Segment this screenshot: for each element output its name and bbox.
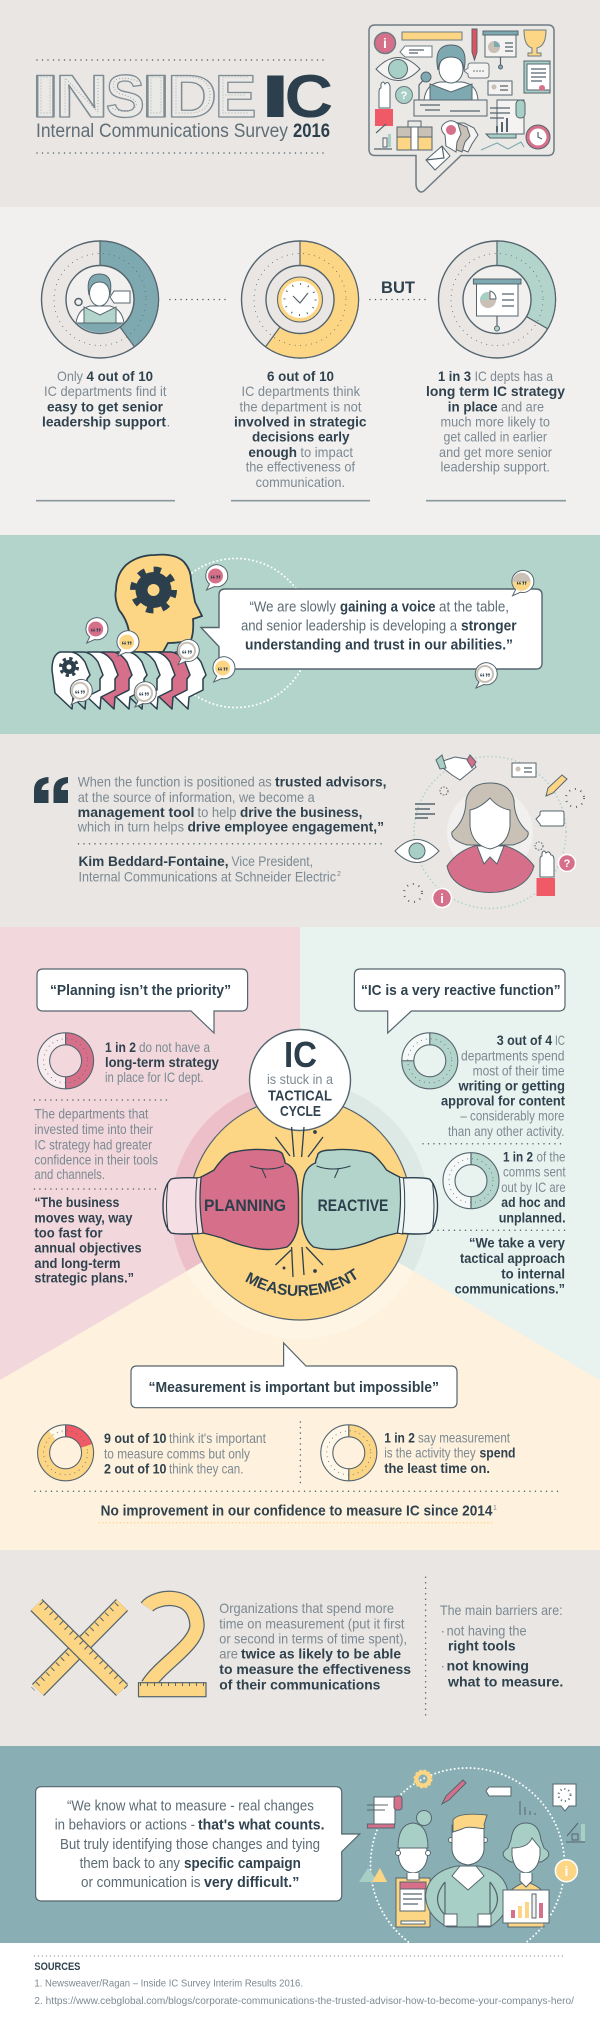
text: one in three: and get more senior: [439, 445, 552, 460]
text: one in three: in place: [448, 400, 498, 414]
text: business moves quote: too fast for: [34, 1225, 103, 1240]
text: three out of four statistic: 3 out of 4: [497, 1033, 553, 1048]
text: six out of ten: 6 out of 10: [267, 369, 334, 384]
icons: small quotation bubbles: “”: [217, 666, 228, 678]
text: one in three: much more likely to: [440, 415, 550, 430]
callout: IC is a very reactive function: “IC is a very reactive function”: [361, 982, 561, 999]
panel: six out of ten: [234, 241, 367, 490]
icon: woman surrounded by tools: [395, 755, 584, 908]
callout: what to measure quote: specific campaign: [184, 1856, 301, 1872]
chart: tactical cycle centre: [162, 1028, 438, 1321]
chart: donut three out of four: [402, 1033, 458, 1089]
icon: presentation board: [473, 279, 521, 331]
text: three out of four statistic: [441, 1033, 565, 1139]
icons: small quotation bubbles: “”: [182, 649, 192, 661]
text: three out of four statistic: IC: [555, 1033, 565, 1048]
text: trusted advisors quote: Vice President,: [232, 854, 313, 869]
ruler two: [138, 1598, 206, 1697]
text: six out of ten: enough: [248, 445, 297, 460]
icon: speech bubble of communication tools: ?: [401, 90, 408, 102]
icons: small quotation bubbles: “”: [480, 672, 490, 684]
text: strategy statistic: in place for IC dept.: [105, 1070, 204, 1085]
text: one in three: long term IC strategy: [426, 384, 565, 399]
text: main barriers: right tools: [448, 1638, 516, 1653]
text: nine out of ten statistic: 2 out of 10: [104, 1462, 166, 1477]
title: INSIDE: E: [215, 63, 257, 130]
text: invested time: IC strategy had greater: [34, 1137, 152, 1152]
subtitle: Internal Communications Survey: [36, 121, 288, 142]
title: INSIDE: S: [106, 63, 145, 130]
title: INSIDE: I: [139, 63, 173, 130]
ruler cross: [33, 1603, 127, 1690]
icon: woman surrounded by tools: i: [440, 891, 444, 906]
panel: planning column: [34, 969, 248, 1286]
text: business moves quote: moves way, way: [34, 1210, 133, 1225]
text: one in three: IC depts has a: [475, 369, 553, 384]
callout: what to measure quote: But truly identifying those changes and tying: [60, 1837, 320, 1853]
text: one in three: and are: [501, 400, 544, 414]
callout: planning isn't the priority: “Planning isn’t the priority”: [50, 982, 231, 999]
text: ad hoc statistic: out by IC are: [501, 1180, 566, 1195]
text: business moves quote: annual objectives: [34, 1241, 142, 1256]
callout: what to measure quote: very difficult.”: [204, 1875, 299, 1891]
text: least time statistic: spend: [480, 1446, 516, 1461]
glove: planning: [163, 1149, 298, 1250]
text: six out of ten: decisions early: [252, 430, 350, 445]
callout: what to measure quote: in behaviors or actions -: [55, 1817, 195, 1833]
text: tactical approach quote: “We take a very: [469, 1236, 565, 1251]
icon: clock: [278, 277, 322, 322]
text: trusted advisors quote: which in turn helps: [77, 820, 184, 834]
icons: small quotation bubbles: “”: [121, 640, 132, 652]
text: twice as likely: [219, 1601, 411, 1692]
icons: small quotation bubbles: “”: [138, 691, 150, 703]
small icons: i: [564, 1863, 568, 1879]
panel: four out of ten: [42, 241, 170, 430]
text: invested time: and channels.: [34, 1167, 105, 1182]
callout: what to measure quote: them back to any: [80, 1856, 181, 1872]
panel: tactical cycle background: [0, 927, 600, 1550]
glove: reactive: [302, 1149, 438, 1250]
text: strategy statistic: [105, 1040, 219, 1085]
badge: IC is stuck in a tactical cycle: [250, 1030, 350, 1130]
panel: sources: [0, 1943, 600, 2019]
panel: measurement column: [35, 1343, 561, 1523]
text: six out of ten: the department is not: [240, 400, 362, 414]
callout: voice at the table quote: understanding and trust in our abilities.”: [245, 638, 513, 654]
text: trusted advisors quote: Kim Beddard-Fontaine,: [78, 854, 228, 869]
text: trusted advisors quote: to help: [198, 805, 236, 820]
text: business moves quote: “The business: [34, 1195, 119, 1210]
text: nine out of ten statistic: to measure comms but only: [104, 1446, 250, 1461]
callout: what to measure quote: or communication is: [81, 1875, 200, 1891]
text: trusted advisors quote: at the source of information, we become a: [78, 790, 315, 805]
panel: twice as likely background: [0, 1550, 600, 1746]
text: trusted advisors quote: Internal Communications at Schneider Electric: [78, 870, 336, 884]
callout: voice at the table quote: gaining a voice: [340, 600, 436, 616]
text: tactical approach quote: communications.”: [455, 1282, 565, 1297]
curved label: measurement: MEASUREMENT: [245, 1268, 356, 1296]
text: trusted advisors quote: management tool: [78, 805, 194, 820]
panel: reactive column: [354, 969, 566, 1297]
text: ad hoc statistic: comms sent: [503, 1165, 566, 1180]
text: six out of ten: the effectiveness of: [246, 460, 355, 475]
text: nine out of ten statistic: think they can.: [169, 1462, 243, 1477]
person: centre man: [426, 1814, 508, 1927]
panel: advisor quote background: [0, 734, 600, 927]
icon: row of small heads: [52, 652, 206, 709]
chart: donut nine out of ten: [38, 1425, 94, 1481]
text: twice as likely: of their communications: [219, 1677, 380, 1692]
text: four out of ten: Only: [57, 369, 83, 384]
text: main barriers: ·: [440, 1658, 445, 1673]
label: BUT: [370, 279, 428, 300]
title: IC: C: [285, 63, 333, 130]
icons: small quotation bubbles: “”: [516, 580, 527, 592]
callout: voice at the table quote: [201, 589, 542, 669]
badge: IC is stuck in a tactical cycle: is stuck in a: [267, 1071, 333, 1087]
panel: closing quote background: [0, 1746, 600, 1943]
text: tactical approach quote: [455, 1236, 565, 1297]
text: three out of four statistic: departments spend: [461, 1048, 564, 1063]
text: one in three: leadership support.: [440, 460, 550, 475]
text: twice as likely: time on measurement (put it first: [219, 1616, 405, 1631]
badge: IC is stuck in a tactical cycle: CYCLE: [280, 1103, 321, 1120]
callout: what to measure quote: that's what counts.: [198, 1817, 324, 1833]
text: three out of four statistic: approval for content: [441, 1093, 565, 1108]
text: three out of four statistic: writing or getting: [458, 1078, 565, 1093]
icons: small quotation bubbles: “”: [210, 574, 221, 586]
text: four out of ten: IC departments find it: [44, 384, 167, 399]
icon: x2 built from rulers: [33, 1598, 206, 1697]
text: ad hoc statistic: 1 in 2: [503, 1149, 533, 1164]
icon: team of three with tools: [359, 1770, 585, 1927]
chart: donut one in two reactive: [443, 1153, 499, 1209]
text: trusted advisors quote: trusted advisors,: [275, 774, 386, 790]
callout: voice at the table quote: “We are slowly: [250, 600, 337, 616]
source two: 2. https://www.cebglobal.com/blogs/corporate-communications-the-trusted-advisor-how-to-become-your-companys-hero/: [34, 1995, 574, 2007]
text: six out of ten: involved in strategic: [234, 415, 367, 430]
icon: large opening quotation mark: [34, 777, 68, 803]
chart board: [503, 1890, 549, 1923]
icons: small quotation bubbles: “”: [74, 689, 86, 701]
title: IC: I: [260, 63, 291, 130]
text: least time statistic: is the activity they: [384, 1446, 476, 1461]
text: business moves quote: and long-term: [34, 1256, 120, 1271]
chart: donut one in two planning: [38, 1033, 94, 1089]
text: trusted advisors quote: [77, 774, 387, 884]
icon: person at desk: [74, 274, 130, 332]
text: ad hoc statistic: unplanned.: [499, 1210, 566, 1225]
text: nine out of ten statistic: [104, 1431, 266, 1477]
text: twice as likely: Organizations that spend more: [219, 1601, 394, 1616]
text: four out of ten: leadership support: [42, 415, 166, 430]
text: six out of ten: [234, 369, 367, 490]
text: twice as likely: twice as likely to be able: [241, 1647, 401, 1662]
text: main barriers: [440, 1603, 563, 1690]
callout: what to measure quote: “We know what to measure - real changes: [67, 1799, 314, 1815]
text: trusted advisors quote: 2: [337, 871, 341, 878]
callout: IC is a very reactive function: [354, 969, 565, 1033]
callout: measurement is important but impossible: [131, 1343, 457, 1408]
text: main barriers: what to measure.: [447, 1675, 563, 1690]
text: least time statistic: 1 in 2: [384, 1430, 415, 1445]
text: ad hoc statistic: ad hoc and: [501, 1195, 566, 1210]
callout: planning isn't the priority: [37, 969, 248, 1033]
text: one in three: 1 in 3: [438, 369, 471, 384]
callout: voice at the table quote: stronger: [461, 619, 517, 635]
icon: speech bubble of communication tools: [369, 25, 554, 192]
callout: measurement is important but impossible: “Measurement is important but impossible”: [148, 1379, 439, 1396]
chart: donut one third: [438, 241, 556, 358]
circle: measurement: [189, 1098, 411, 1320]
text: main barriers: not having the: [447, 1624, 527, 1639]
icon: large head with gear: [115, 555, 202, 652]
text: invested time: The departments that: [34, 1107, 149, 1122]
callout: voice at the table quote: at the table,: [439, 600, 509, 616]
title: INSIDE: D: [167, 63, 217, 130]
text: strategy statistic: do not have a: [139, 1040, 210, 1055]
text: four out of ten: 4 out of 10: [86, 369, 153, 384]
source one: 1. Newsweaver/Ragan – Inside IC Survey Interim Results 2016.: [34, 1978, 303, 1990]
text: least time statistic: the least time on.: [384, 1461, 490, 1476]
text: no improvement: No improvement in our confidence to measure IC since 2014: [101, 1503, 493, 1520]
text: three out of four statistic: – considerably more: [460, 1109, 564, 1124]
person: left woman: [396, 1810, 432, 1927]
text: invested time: [34, 1107, 158, 1182]
glove: planning: PLANNING: [204, 1196, 286, 1215]
text: nine out of ten statistic: think it's important: [169, 1431, 266, 1446]
panel: statistics background: [0, 207, 600, 535]
text: twice as likely: are: [219, 1647, 238, 1662]
panel: quote band background: [0, 535, 600, 734]
text: four out of ten: [42, 369, 170, 430]
text: six out of ten: to impact: [300, 445, 353, 460]
text: ad hoc statistic: of the: [536, 1149, 566, 1164]
glove: reactive: REACTIVE: [318, 1196, 388, 1215]
text: tactical approach quote: to internal: [501, 1266, 565, 1281]
text: twice as likely: to measure the effectiveness: [219, 1662, 411, 1677]
text: business moves quote: strategic plans.”: [34, 1271, 134, 1286]
badge: IC is stuck in a tactical cycle: TACTICAL: [268, 1088, 332, 1105]
icon: speech bubble of communication tools: i: [383, 35, 387, 51]
sparks: [276, 1127, 323, 1277]
text: no improvement: 1: [493, 1505, 497, 1512]
chart: donut 40 percent: [42, 241, 158, 358]
text: trusted advisors quote: drive the business,: [240, 805, 362, 820]
title: INSIDE: N: [55, 63, 108, 130]
text: ad hoc statistic: [499, 1149, 566, 1225]
text: invested time: invested time into their: [34, 1122, 153, 1137]
small icons: [359, 1770, 585, 1882]
icons: small quotation bubbles: [70, 565, 534, 707]
panel: header background: [0, 0, 600, 207]
text: nine out of ten statistic: 9 out of 10: [104, 1431, 166, 1446]
text: three out of four statistic: than any other activity.: [448, 1124, 564, 1139]
text: strategy statistic: 1 in 2: [105, 1040, 136, 1055]
subtitle: 2016: [293, 121, 330, 142]
text: six out of ten: IC departments think: [242, 384, 360, 399]
panel: one in three: [426, 241, 565, 475]
chart: donut 60 percent: [242, 241, 359, 358]
text: least time statistic: [384, 1430, 516, 1476]
text: least time statistic: say measurement: [418, 1430, 510, 1445]
badge: IC is stuck in a tactical cycle: IC: [284, 1034, 317, 1075]
text: three out of four statistic: most of their time: [473, 1064, 564, 1079]
text: one in three: [426, 369, 565, 475]
text: twice as likely: or second in terms of time spent),: [219, 1632, 407, 1647]
text: four out of ten: .: [166, 415, 170, 430]
text: invested time: confidence in their tools: [34, 1152, 158, 1167]
chart: donut one in two measurement: [321, 1425, 377, 1481]
icons: small quotation bubbles: “”: [90, 627, 101, 639]
text: main barriers: ·: [440, 1624, 445, 1639]
text: tactical approach quote: tactical approach: [460, 1251, 565, 1266]
callout: what to measure quote: [36, 1787, 360, 1901]
title: INSIDE: I: [30, 63, 61, 130]
text: trusted advisors quote: drive employee engagement,”: [188, 820, 384, 834]
label: BUT: BUT: [381, 279, 415, 297]
text: main barriers: The main barriers are:: [440, 1603, 563, 1618]
text: six out of ten: communication.: [256, 475, 345, 490]
text: trusted advisors quote: When the function is positioned as: [78, 774, 272, 790]
text: main barriers: not knowing: [447, 1658, 529, 1673]
text: business moves quote: [34, 1195, 142, 1286]
text: four out of ten: easy to get senior: [47, 400, 164, 414]
text: strategy statistic: long-term strategy: [105, 1055, 219, 1070]
person: right woman: [503, 1823, 549, 1927]
heading: sources: SOURCES: [34, 1961, 80, 1973]
text: one in three: get called in earlier: [444, 430, 547, 445]
title block: [30, 60, 333, 153]
callout: voice at the table quote: and senior leadership is developing a: [241, 619, 458, 635]
icon: woman surrounded by tools: ?: [564, 858, 571, 870]
